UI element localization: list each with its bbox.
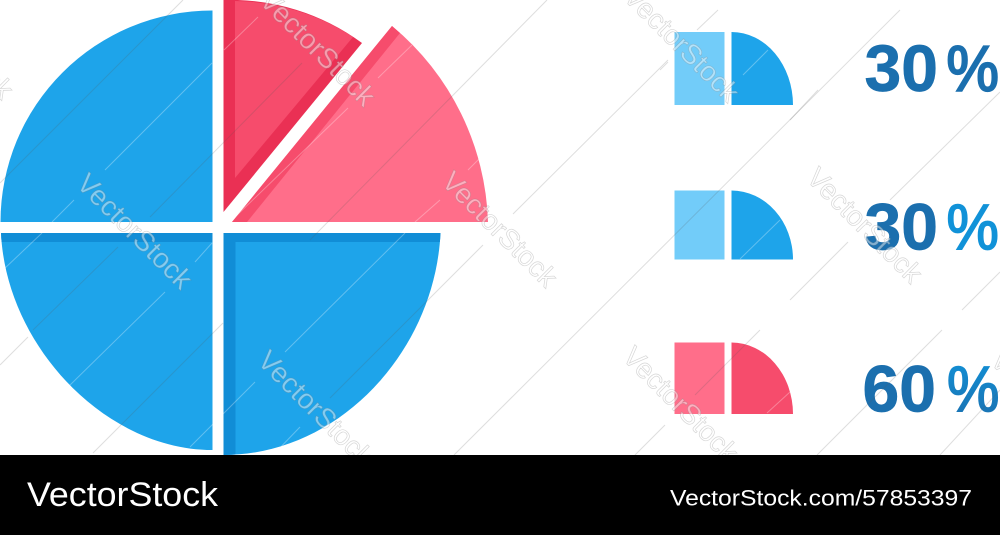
slice: bottom-left blue quarter [0,233,213,451]
pie chart [0,0,488,455]
percent sign: % [946,33,999,105]
legend row 1: blue 30% [674,31,999,105]
watermark text: VectorStock [436,165,564,294]
watermark text: VectorStock [617,340,745,469]
legend row 3: red 60% [674,342,999,426]
value: 30: 30 [864,190,938,264]
slice: large pink wedge [232,26,488,222]
legend swatch: light blue bar [674,190,724,260]
legend swatch: light blue bar [674,32,724,105]
legend row 2: blue 30% [674,190,999,264]
watermark text: VectorStock [801,161,929,290]
percent sign: % [946,192,999,264]
value: 30: 30 [864,31,938,105]
footer brand: VectorStock [27,476,219,514]
footer bar [0,455,1000,535]
slice: top red wedge [224,0,362,212]
watermark text: VectorStock [71,167,199,296]
watermark text: VectorStock [252,344,380,473]
legend swatch: blue quarter [732,32,793,105]
percent sign: % [947,354,999,426]
footer image id: VectorStock.com/57853397 [670,486,972,510]
slice: bottom-right blue quarter [223,233,441,455]
legend swatch: pink bar [674,342,724,414]
legend swatch: red quarter [732,342,793,414]
legend swatch: blue quarter [732,190,793,260]
slice: top-left blue quarter [0,10,212,222]
value: 60: 60 [862,352,936,426]
